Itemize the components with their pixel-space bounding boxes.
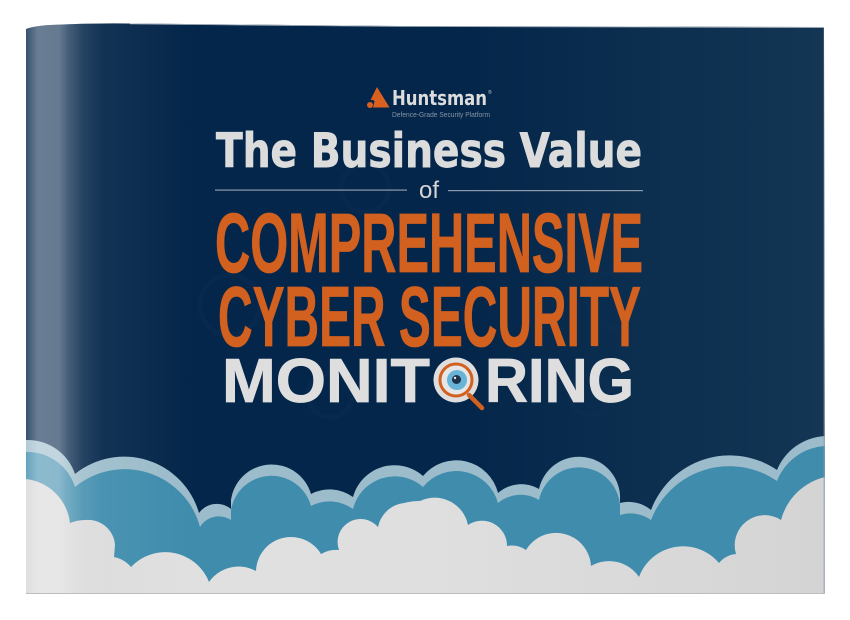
wordmark: Huntsman	[392, 86, 487, 110]
bottom edge line	[26, 593, 825, 594]
tagline: Defence-Grade Security Platform	[392, 110, 490, 119]
spine gloss highlight	[26, 24, 141, 593]
divider: of: of	[419, 177, 439, 204]
faint gear watermarks	[200, 164, 643, 417]
top edge line	[130, 24, 824, 27]
logo: Huntsman	[367, 86, 492, 119]
icon: triangle and dot	[367, 87, 390, 108]
cloud layer: mid blue	[26, 446, 825, 596]
heading: The Business Value: The Business Value	[216, 124, 642, 179]
heading: Monitoring: MONIT	[222, 347, 430, 416]
icon: magnifying glass with eye	[434, 358, 482, 408]
registered mark: ®	[488, 89, 492, 96]
cloud layer: pale back band	[26, 436, 825, 527]
heading: Monitoring	[222, 347, 634, 416]
cloud layer: white front	[26, 477, 825, 596]
right edge line	[824, 27, 825, 594]
heading: Monitoring: RING	[485, 347, 634, 416]
navy cover background	[26, 23, 825, 513]
